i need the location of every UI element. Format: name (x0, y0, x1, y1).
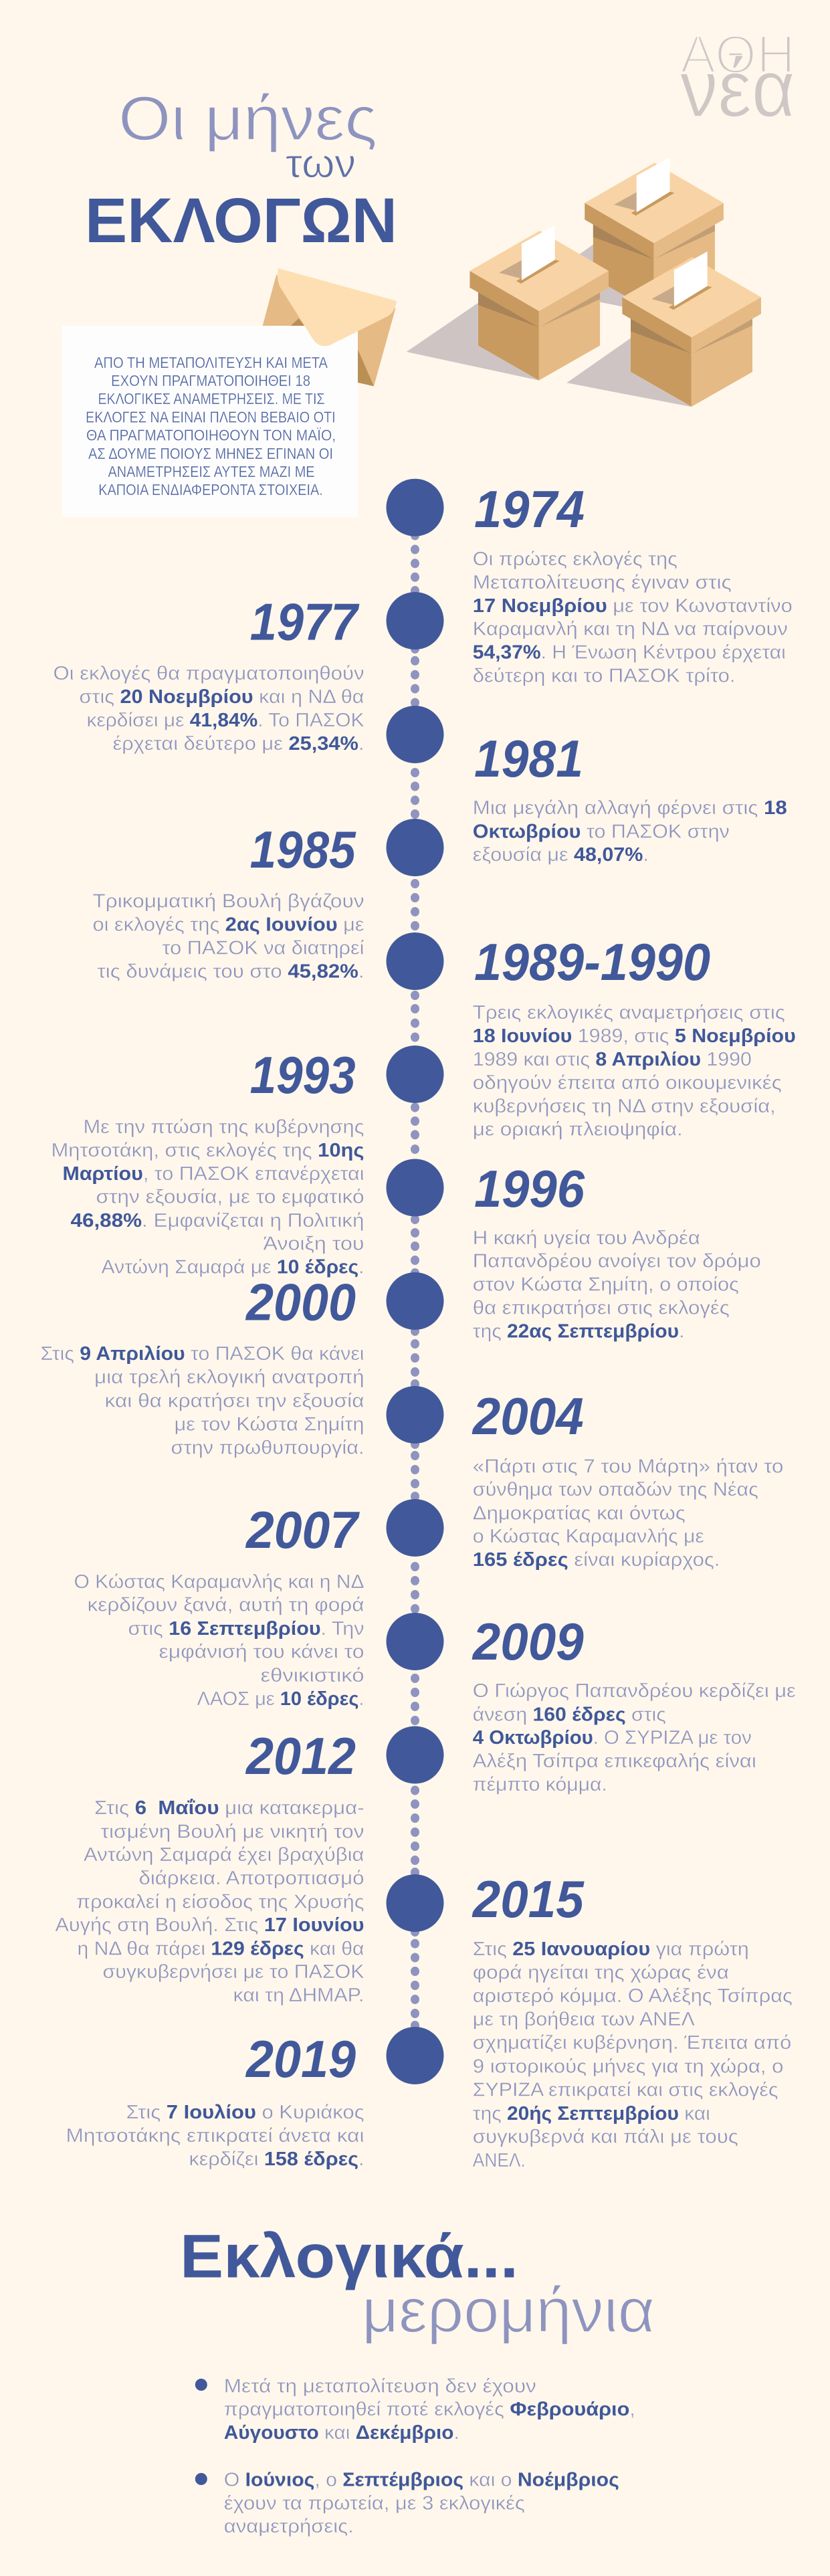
timeline entry: 2015: 9 ιστορικούς μήνες για τη χώρα, ο (473, 2056, 783, 2078)
heading: Εκλογικά μερομήνια: Εκλογικά... (180, 2223, 518, 2291)
timeline entry: 2004: σύνθημα των οπαδών της Νέας (473, 1479, 758, 1500)
timeline entry: 2015: Στις 25 Ιανουαρίου για πρώτη (473, 1939, 749, 1960)
timeline entry: 2012: προκαλεί η είσοδος της Χρυσής (76, 1892, 364, 1913)
timeline entry: 1985: το ΠΑΣΟΚ να διατηρεί (162, 938, 365, 959)
bullet: months without elections: πραγματοποιηθεί ποτέ εκλογές Φεβρουάριο , (224, 2399, 635, 2420)
timeline entry: 2015: φορά ηγείται της χώρας ένα (473, 1962, 729, 1983)
timeline entry: 1981: Οκτωβρίου το ΠΑΣΟΚ στην (473, 821, 730, 843)
timeline entry: 1974: Καραμανλή και τη ΝΔ να παίρνουν (473, 618, 788, 639)
title (85, 84, 397, 256)
timeline entry: 2012: συγκυβερνήσει με το ΠΑΣΟΚ (103, 1961, 364, 1983)
timeline entry: 1989-1990: 1989-1990 (474, 932, 710, 991)
timeline entry: 1977 (54, 592, 444, 755)
timeline entry: 1974: Μεταπολίτευσης έγιναν στις (473, 572, 732, 593)
timeline entry: 1996: της 22ας Σεπτεμβρίου . (473, 1320, 684, 1342)
timeline entry: 1993: Άνοιξη του (264, 1233, 364, 1255)
timeline entry: 1993: Μαρτίου , το ΠΑΣΟΚ επανέρχεται (63, 1163, 364, 1185)
timeline entry: 1993 (51, 1046, 444, 1278)
timeline entry: 1981: Μια μεγάλη αλλαγή φέρνει στις 18 (473, 797, 787, 819)
timeline entry: 2000: και θα κρατήσει την εξουσία (104, 1390, 364, 1411)
timeline entry: 1974: 17 Νοεμβρίου με τον Κωνσταντίνο (473, 595, 793, 617)
bullet: most frequent months (195, 2470, 619, 2537)
bullet: most frequent months: Ο Ιούνιος, ο Σεπτέμβριος και ο Νοέμβριος (224, 2470, 619, 2491)
intro panel: ΕΚΛΟΓΕΣ ΝΑ ΕΙΝΑΙ ΠΛΕΟΝ ΒΕΒΑΙΟ ΟΤΙ (86, 409, 336, 426)
timeline entry: 2009 (387, 1612, 796, 1795)
timeline entry: 1993: στην εξουσία, με το εμφατικό (96, 1187, 364, 1208)
timeline entry: 1985: Τρικομματική Βουλή βγάζουν (92, 891, 364, 912)
intro panel: ΑΝΑΜΕΤΡΗΣΕΙΣ ΑΥΤΕΣ ΜΑΖΙ ΜΕ (108, 463, 314, 480)
timeline entry: 2000: μια τρελή εκλογική ανατροπή (94, 1367, 365, 1388)
timeline entry: 1993: 1993 (250, 1046, 356, 1104)
timeline entry: 2004 (387, 1386, 783, 1571)
timeline entry: 2015: αριστερό κόμμα. Ο Αλέξης Τσίπρας (473, 1985, 793, 2007)
heading: Εκλογικά μερομήνια: μερομήνια (362, 2276, 655, 2345)
timeline entry: 2007: Ο Κώστας Καραμανλής και η ΝΔ (74, 1571, 364, 1593)
timeline entry: 2007 (74, 1499, 444, 1710)
timeline entry: 2004: Δημοκρατίας και όντως (473, 1502, 686, 1524)
timeline entry: 1974: 1974 (474, 480, 585, 538)
timeline entry: 2012: 2012 (245, 1726, 356, 1785)
timeline entry: 2000: με τον Κώστα Σημίτη (174, 1414, 364, 1435)
timeline entry: 1974: Οι πρώτες εκλογές της (473, 549, 678, 570)
heading: Εκλογικά μερομήνια (180, 2223, 655, 2345)
timeline entry: 1993: 46,88% . Εμφανίζεται η Πολιτική (71, 1210, 364, 1231)
timeline entry: 2012: η ΝΔ θα πάρει 129 έδρες και θα (78, 1938, 364, 1959)
timeline entry: 2009: 4 Οκτωβρίου. Ο ΣΥΡΙΖΑ με τον (473, 1727, 752, 1749)
timeline entry: 2012 (55, 1726, 444, 2006)
timeline entry: 2012: Αυγής στη Βουλή. Στις 17 Ιουνίου (55, 1914, 364, 1936)
timeline entry: 2019: κερδίζει 158 έδρες . (189, 2149, 364, 2170)
icon: envelope back (261, 274, 396, 386)
timeline entry: 2000 (40, 1272, 444, 1458)
timeline entry: 1985: 1985 (250, 820, 356, 879)
timeline entry: 2009: Αλέξη Τσίπρα επικεφαλής είναι (473, 1751, 756, 1772)
timeline entry: 2007: εμφάνισή του κάνει το (159, 1642, 364, 1663)
timeline entry: 2019: Μητσοτάκης επικρατεί άνετα και (66, 2125, 364, 2147)
title: Οι μήνες (118, 84, 377, 153)
timeline entry: 1985: οι εκλογές της 2ας Ιουνίου με (92, 914, 365, 935)
timeline entry: 1989-1990: 1989 και στις 8 Απριλίου 1990 (473, 1049, 752, 1070)
timeline entry: 1989-1990: οδηγούν έπειτα από οικουμενικές (473, 1072, 782, 1094)
intro panel: ΕΚΛΟΓΙΚΕΣ ΑΝΑΜΕΤΡΗΣΕΙΣ. ΜΕ ΤΙΣ (98, 390, 325, 407)
timeline entry: 1981: εξουσία με 48,07%. (473, 844, 649, 866)
icon: envelope flap (278, 268, 397, 346)
timeline entry: 2015: της 20ής Σεπτεμβρίου και (473, 2103, 710, 2124)
timeline entry: 1996: Η κακή υγεία του Ανδρέα (473, 1227, 700, 1249)
bullet: months without elections (195, 2376, 635, 2444)
timeline entry: 2004: 165 έδρες είναι κυρίαρχος. (473, 1549, 720, 1571)
timeline entry: 1996: στον Κώστα Σημίτη, ο οποίος (473, 1274, 739, 1295)
timeline entry: 1993: Αντώνη Σαμαρά με 10 έδρες. (102, 1256, 364, 1278)
timeline entry: 1989-1990: Τρεις εκλογικές αναμετρήσεις στις (473, 1002, 785, 1023)
timeline entry: 1977: 1977 (250, 593, 360, 652)
title: των (286, 141, 356, 186)
intro panel: ΘΑ ΠΡΑΓΜΑΤΟΠΟΙΗΘΟΥΝ ΤΟΝ ΜΑΪΟ, (86, 427, 336, 444)
timeline entry: 1974 (387, 479, 793, 686)
timeline entry: 2007: εθνικιστικό (261, 1665, 364, 1686)
timeline entry: 2004: «Πάρτι στις 7 του Μάρτη» ήταν το (473, 1456, 783, 1477)
timeline entry: 1977: έρχεται δεύτερο με 25,34% . (112, 733, 365, 755)
timeline entry: 2000: στην πρωθυπουργία. (171, 1437, 364, 1458)
intro panel: ΚΑΠΟΙΑ ΕΝΔΙΑΦΕΡΟΝΤΑ ΣΤΟΙΧΕΙΑ. (98, 481, 323, 498)
timeline entry: 2007: 2007 (245, 1500, 360, 1559)
timeline entry: 1981: 1981 (474, 729, 583, 788)
logo: Τα Νέα: νέα (680, 43, 795, 134)
timeline entry: 1985: τις δυνάμεις του στο 45,82% . (98, 961, 364, 983)
timeline entry: 1989-1990: 18 Ιουνίου 1989, στις 5 Νοεμβρίου (473, 1025, 796, 1047)
timeline dots (411, 531, 419, 2030)
intro panel: ΕΧΟΥΝ ΠΡΑΓΜΑΤΟΠΟΙΗΘΕΙ 18 (111, 372, 310, 389)
timeline entry: 1977: Οι εκλογές θα πραγματοποιηθούν (54, 663, 364, 684)
timeline entry: 2000: 2000 (245, 1272, 356, 1331)
title: ΕΚΛΟΓΩΝ (85, 185, 397, 256)
timeline entry: 1996: Παπανδρέου ανοίγει τον δρόμο (473, 1251, 761, 1272)
timeline entry: 2009: πέμπτο κόμμα. (473, 1774, 607, 1795)
timeline entry: 2012: Αντώνη Σαμαρά έχει βραχύβια (84, 1844, 364, 1866)
timeline entry: 2015: συγκυβερνά και πάλι με τους (473, 2126, 738, 2148)
timeline entry: 1996: 1996 (474, 1159, 585, 1218)
timeline entry: 1996 (387, 1159, 761, 1342)
timeline entry: 2015: 2015 (472, 1870, 585, 1928)
timeline entry: 2015: ΣΥΡΙΖΑ επικρατεί και στις εκλογές (473, 2080, 779, 2101)
timeline entry: 1977: στις 20 Νοεμβρίου και η ΝΔ θα (79, 686, 364, 708)
bullet: months without elections: Μετά τη μεταπολίτευση δεν έχουν (224, 2376, 536, 2397)
timeline entry: 2012: διάρκεια. Αποτροπιασμό (139, 1868, 364, 1889)
timeline entry: 1989-1990: με οριακή πλειοψηφία. (473, 1118, 683, 1140)
timeline entry: 2007: στις 16 Σεπτεμβρίου . Την (128, 1618, 364, 1640)
timeline entry: 2009: 2009 (472, 1612, 584, 1671)
timeline entry: 1993: Μητσοτάκη, στις εκλογές της 10ης (51, 1140, 364, 1161)
timeline entry: 2007: κερδίζουν ξανά, αυτή τη φορά (87, 1595, 364, 1616)
intro panel: ΑΠΟ ΤΗ ΜΕΤΑΠΟΛΙΤΕΥΣΗ ΚΑΙ ΜΕΤΑ (94, 354, 328, 371)
timeline entry: 1989-1990 (387, 932, 796, 1140)
timeline entry: 2004: ο Κώστας Καραμανλής με (473, 1526, 704, 1547)
timeline entry: 2009: άνεση 160 έδρες στις (473, 1704, 666, 1725)
timeline entry: 2015: ΑΝΕΛ. (473, 2150, 526, 2171)
icon: ballot boxes (407, 157, 761, 407)
bullet: most frequent months: αναμετρήσεις. (224, 2516, 354, 2537)
timeline entry: 1993: Με την πτώση της κυβέρνησης (83, 1116, 364, 1138)
timeline entry: 2015: σχηματίζει κυβέρνηση. Έπειτα από (473, 2032, 791, 2054)
timeline entry: 1996: θα επικρατήσει στις εκλογές (473, 1298, 730, 1319)
timeline entry: 2007: ΛΑΟΣ με 10 έδρες. (197, 1688, 364, 1710)
intro panel: ΑΣ ΔΟΥΜΕ ΠΟΙΟΥΣ ΜΗΝΕΣ ΕΓΙΝΑΝ ΟΙ (88, 445, 333, 462)
timeline entry: 2004: 2004 (472, 1387, 584, 1446)
timeline entry: 2009: Ο Γιώργος Παπανδρέου κερδίζει με (473, 1680, 796, 1702)
timeline entry: 1989-1990: κυβερνήσεις τη ΝΔ στην εξουσία, (473, 1096, 776, 1117)
timeline entry: 1974: 54,37%. Η Ένωση Κέντρου έρχεται (473, 642, 786, 664)
bullet: months without elections: Αύγουστο και Δεκέμβριο. (224, 2422, 459, 2444)
timeline entry: 1977: κερδίσει με 41,84%. Το ΠΑΣΟΚ (87, 710, 364, 731)
timeline entry: 2015: με τη βοήθεια των ΑΝΕΛ (473, 2009, 695, 2030)
timeline entry: 1974: δεύτερη και το ΠΑΣΟΚ τρίτο. (473, 665, 735, 686)
timeline entry: 1985 (92, 819, 444, 983)
timeline entry: 2000: Στις 9 Απριλίου το ΠΑΣΟΚ θα κάνει (40, 1343, 364, 1365)
timeline entry: 2012: τισμένη Βουλή με νικητή τον (100, 1821, 364, 1842)
timeline entry: 1981 (387, 706, 787, 866)
timeline entry: 2019 (66, 2027, 444, 2170)
timeline entry: 2012: και τη ΔΗΜΑΡ. (233, 1985, 364, 2006)
timeline entry: 2019: 2019 (245, 2029, 356, 2088)
logo: Τα Νέα: ΑΘΗ (680, 25, 795, 85)
bullet: most frequent months: έχουν τα πρωτεία, με 3 εκλογικές (224, 2492, 525, 2514)
intro panel (62, 326, 358, 517)
timeline entry: 2012: Στις 6 Μαΐου μια κατακερμα- (94, 1797, 365, 1819)
timeline entry: 2015 (387, 1870, 793, 2171)
timeline entry: 2019: Στις 7 Ιουλίου ο Κυριάκος (126, 2102, 364, 2123)
